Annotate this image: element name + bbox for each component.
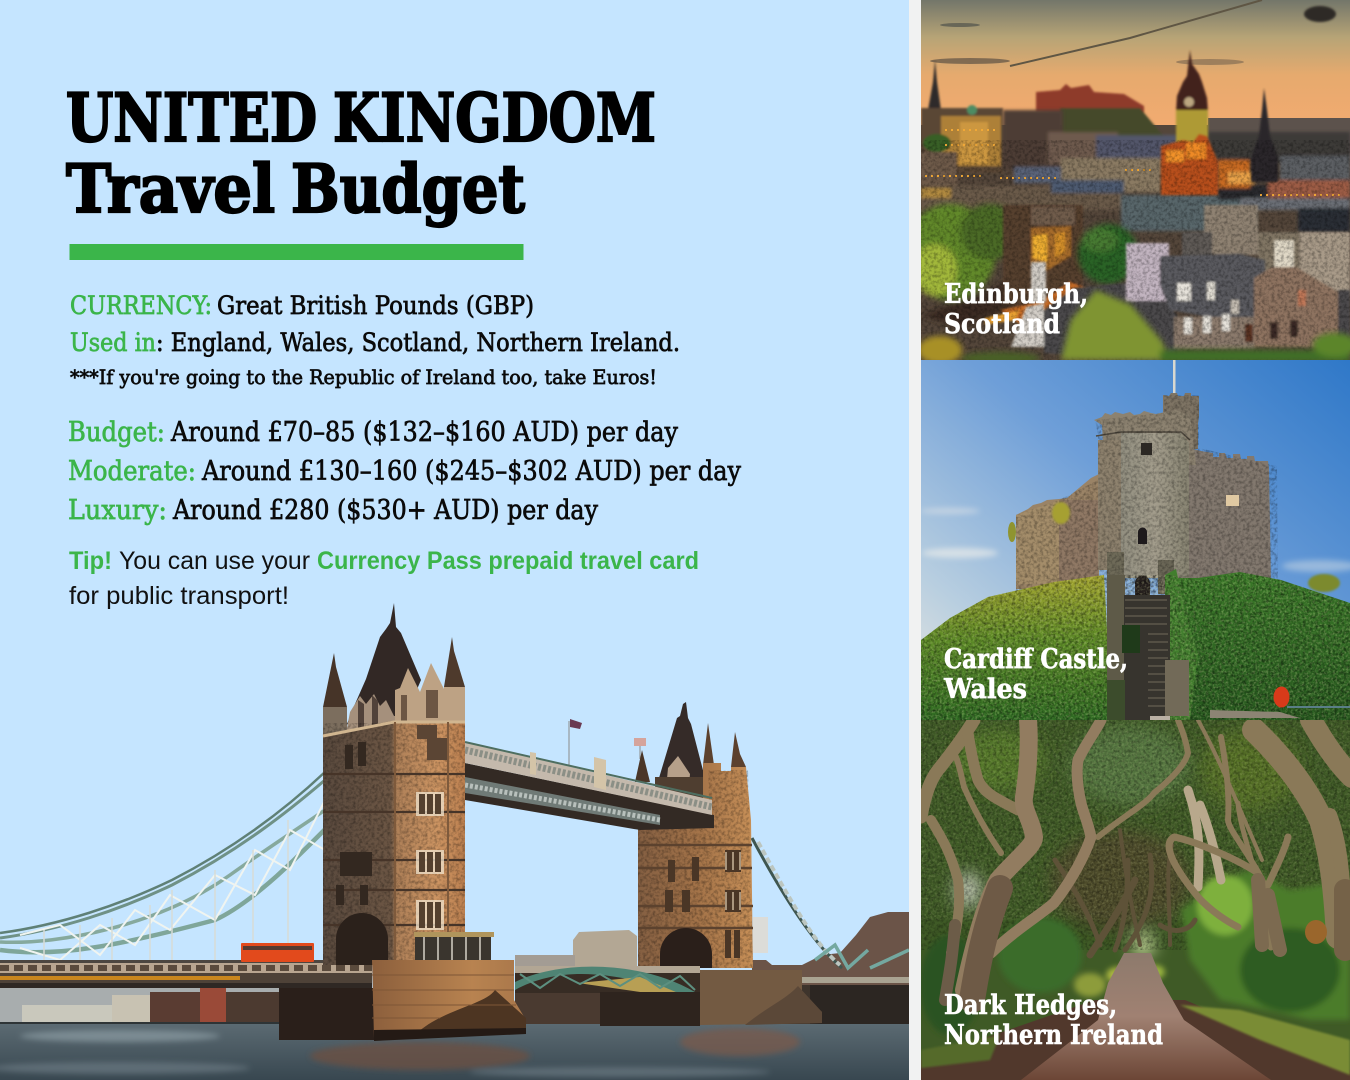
town texture [921, 140, 1350, 360]
travel tip: Tip! [69, 547, 112, 575]
budget levels [68, 417, 742, 526]
budget levels: Around £70–85 ($132–$160 AUD) per day [170, 417, 679, 448]
budget levels: Moderate: [68, 456, 196, 487]
Scott monument [1251, 88, 1278, 182]
photo: Cardiff Castle [920, 360, 1350, 720]
water reflections [0, 1028, 800, 1077]
castle keep [1008, 393, 1278, 595]
right tower pier [600, 970, 822, 1026]
currency information: Used in [70, 328, 156, 357]
walkway and fence [1150, 706, 1350, 720]
caption: Dark Hedges: Northern Ireland [944, 1020, 1163, 1051]
currency information: CURRENCY: [70, 291, 212, 320]
right tower [635, 702, 753, 968]
travel tip: Currency Pass prepaid travel card [317, 547, 699, 575]
caption: Edinburgh: Edinburgh, [944, 279, 1088, 310]
hill highlight texture [921, 572, 1350, 720]
divider strip [909, 0, 921, 1080]
stone stairs [1107, 575, 1189, 720]
grassy hill [921, 569, 1350, 720]
left road deck [0, 960, 372, 988]
title [66, 79, 656, 228]
clouds and contrail [930, 0, 1336, 66]
tan town buildings [1182, 205, 1350, 294]
canopy highlights [921, 720, 1350, 920]
left suspension cables [0, 772, 323, 960]
warm lit windows [925, 130, 1340, 195]
travel tip: for public transport! [69, 582, 289, 610]
budget levels: Budget: [68, 417, 165, 448]
background panel [0, 0, 909, 1080]
left green trees [921, 202, 1018, 328]
right suspension cable [752, 838, 909, 983]
distant buildings left [0, 988, 279, 1024]
green title rule [70, 244, 524, 260]
middle town roofs [921, 110, 1350, 232]
caption: Cardiff Castle: Wales [943, 674, 1027, 705]
stone texture [1016, 395, 1278, 591]
photo: Edinburgh [904, 0, 1350, 364]
currency information: Great British Pounds (GBP) [217, 291, 534, 320]
travel tip [69, 547, 699, 610]
distant buildings right [515, 912, 909, 1032]
evening sky [921, 0, 1350, 125]
currency information [70, 291, 680, 389]
flags [569, 719, 646, 766]
caption: Edinburgh: Scotland [944, 309, 1060, 340]
bright hedges [920, 870, 1350, 1035]
right small arch bridge [515, 966, 700, 993]
left tower [323, 603, 465, 965]
caption: Dark Hedges [944, 990, 1163, 1051]
photo: Dark Hedges [920, 720, 1350, 1080]
high-level walkway [465, 742, 714, 830]
wispy clouds [920, 508, 1350, 572]
title: UNITED [66, 79, 317, 157]
caption: Edinburgh [944, 279, 1088, 340]
budget levels: Around £130–160 ($245–$302 AUD) per day [201, 456, 742, 487]
left tower base and pier [279, 960, 526, 1041]
glass kiosk on pier [414, 932, 494, 960]
water [0, 1024, 909, 1080]
castle and hill [1034, 83, 1161, 135]
currency information: ***If you're going to the Republic of Ireland too, take Euros! [70, 365, 657, 389]
title: Budget [291, 150, 525, 228]
canopy texture [921, 720, 1350, 950]
light canopy patches [954, 725, 1300, 957]
far horizon [1208, 118, 1350, 134]
caption: Cardiff Castle [943, 644, 1128, 705]
budget levels: Around £280 ($530+ AUD) per day [172, 495, 599, 526]
warm mid building [1000, 205, 1090, 324]
travel tip: You can use your [119, 547, 310, 575]
beech trunks and branches [921, 720, 1350, 1000]
road and verges [921, 953, 1350, 1080]
caption: Cardiff Castle: Cardiff Castle, [944, 644, 1128, 675]
photo: Tower Bridge [0, 603, 909, 1080]
town base [921, 120, 1350, 360]
budget levels: Luxury: [68, 495, 167, 526]
red double-decker bus [241, 943, 314, 962]
currency information: : England, Wales, Scotland, Northern Ireland. [156, 328, 680, 357]
caption: Dark Hedges: Dark Hedges, [944, 990, 1117, 1021]
title: KINGDOM [333, 79, 656, 157]
canopy background [921, 720, 1350, 1080]
title: Travel [66, 150, 275, 228]
green tree centre [1078, 224, 1138, 284]
hill shadow texture [921, 572, 1350, 720]
flagpole [1173, 360, 1176, 396]
red life ring [1274, 686, 1290, 708]
tree stump detail [1305, 920, 1327, 944]
left spire and golden buildings [921, 60, 1003, 186]
foreground greenery [918, 290, 1350, 364]
slate roofs and stone houses [985, 240, 1350, 361]
Balmoral clock tower [1161, 50, 1218, 195]
blue sky [921, 360, 1350, 640]
